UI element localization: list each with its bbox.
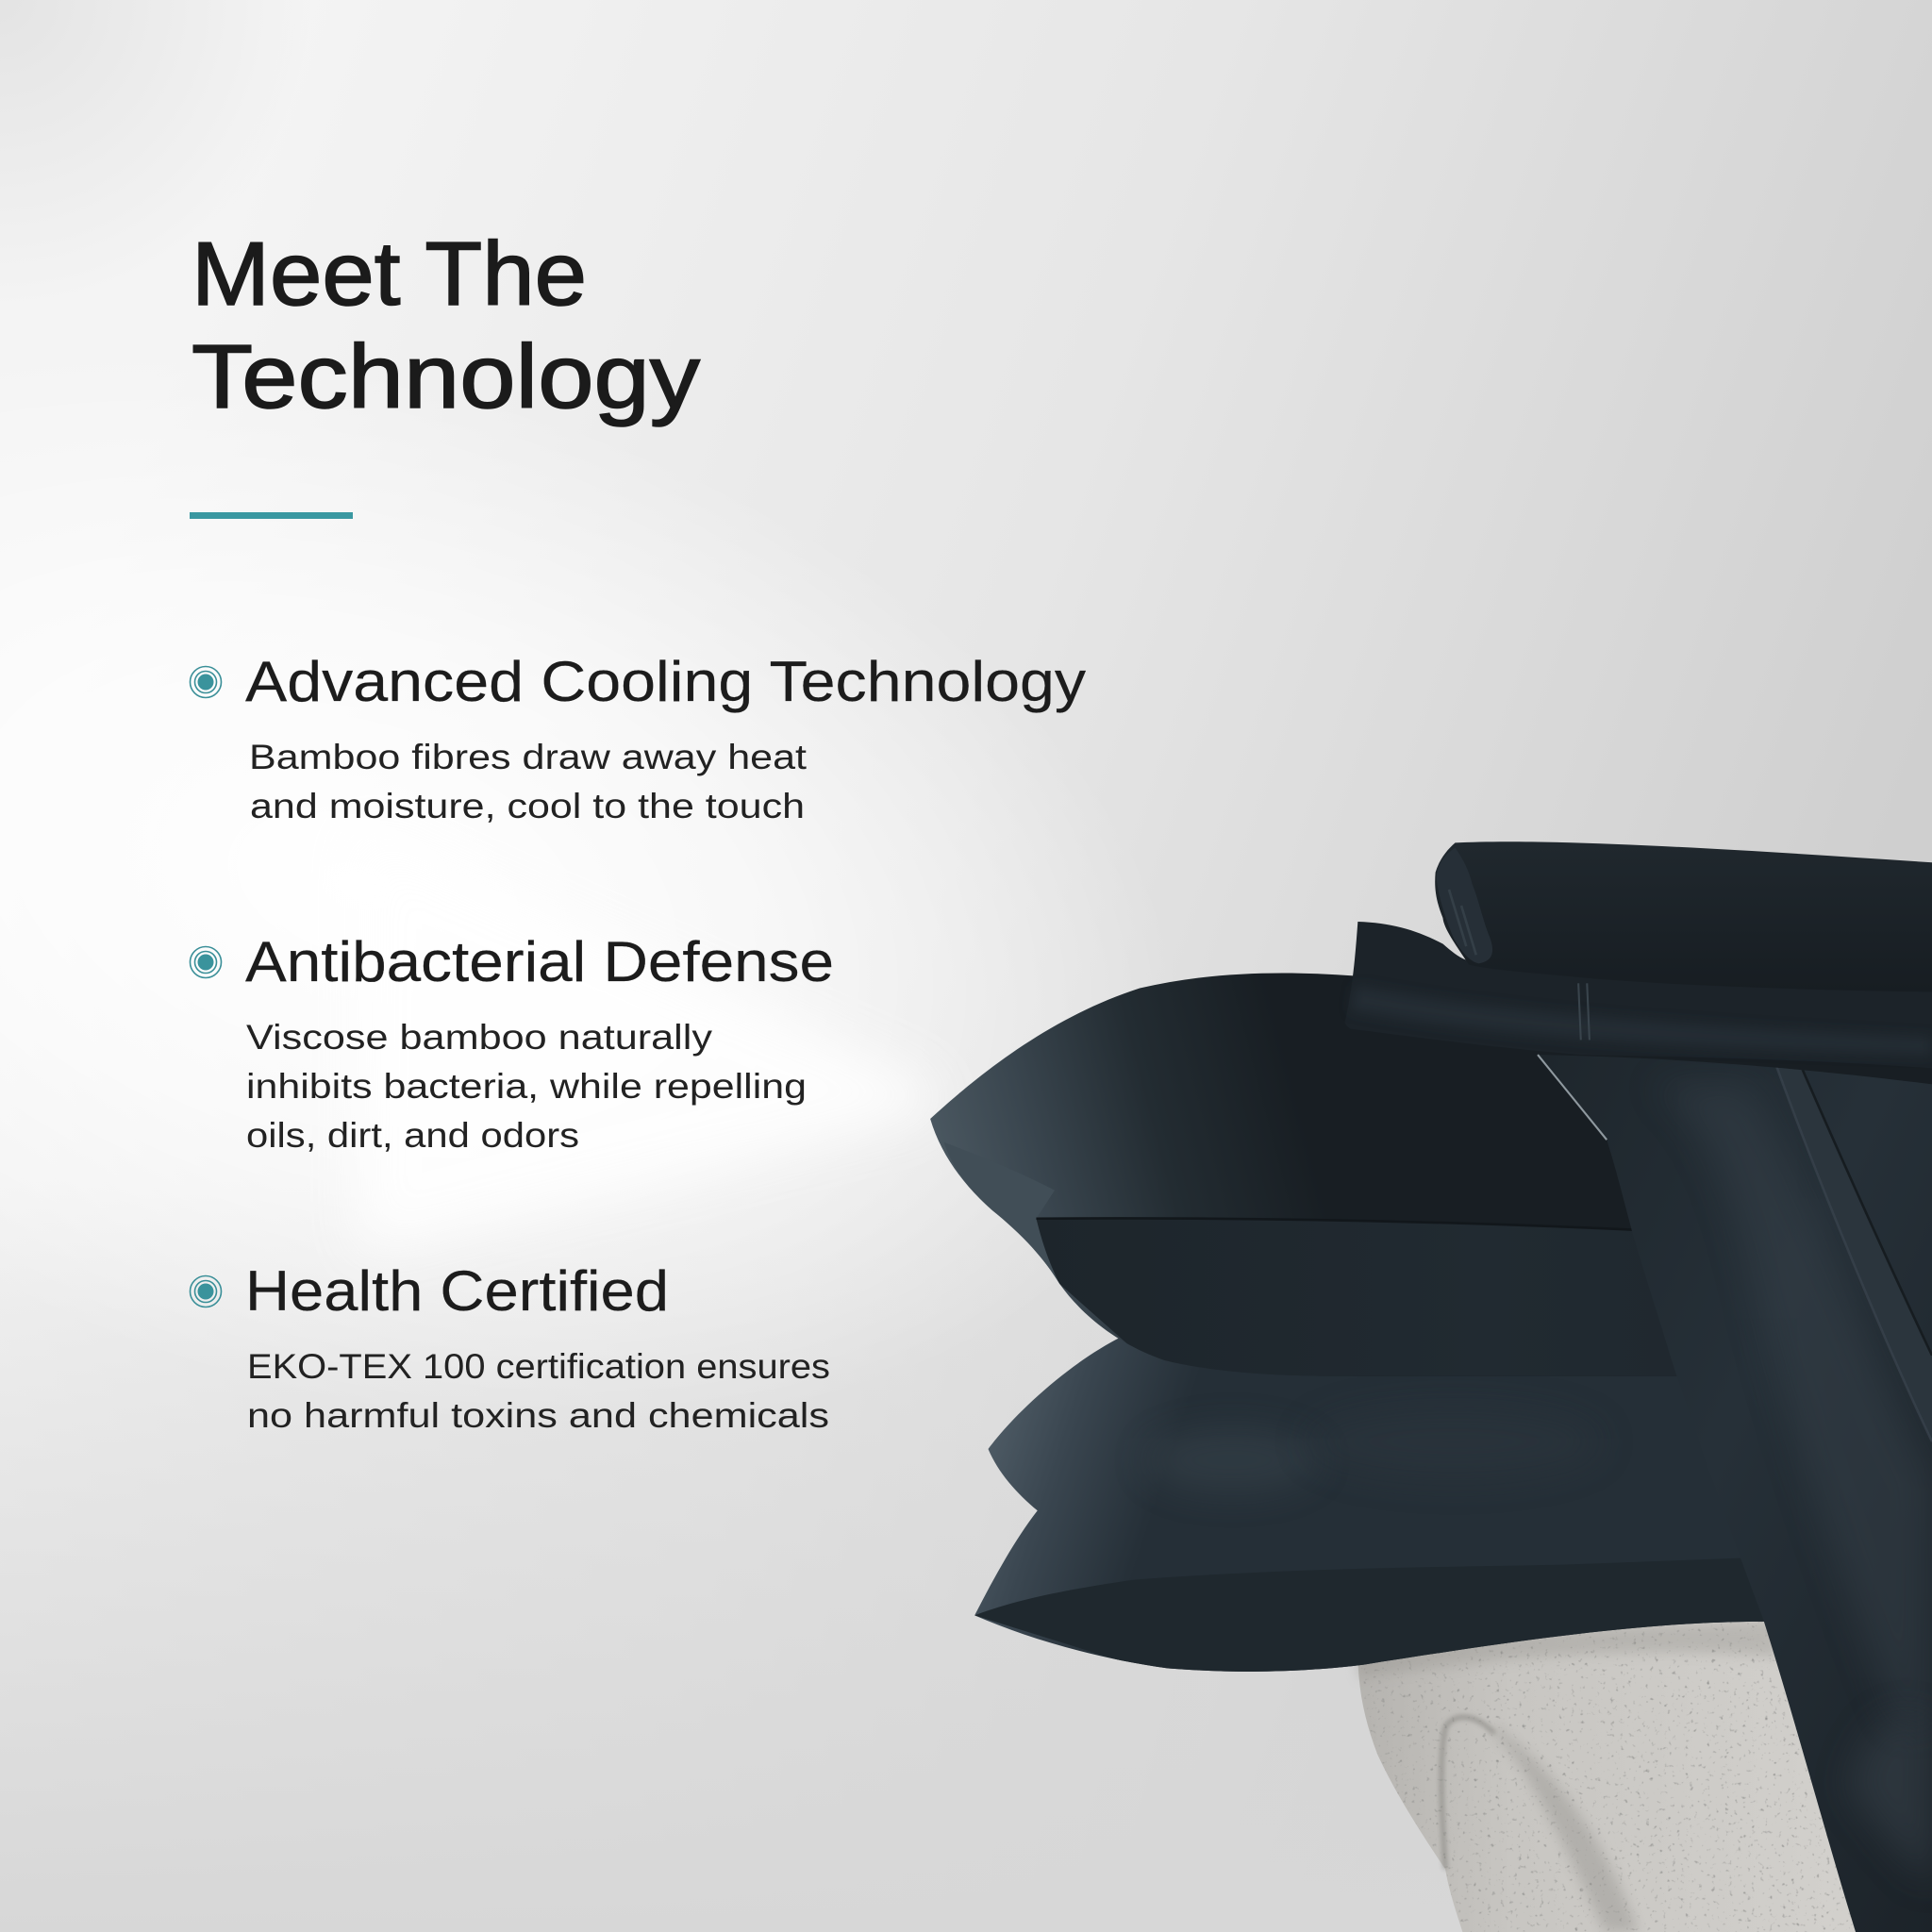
heading: Antibacterial Defense [245, 930, 834, 993]
description: EKO-TEX 100 certification ensures [247, 1347, 830, 1386]
heading: Advanced Cooling Technology [245, 650, 1086, 713]
title [192, 224, 700, 427]
upper pillow [930, 973, 1932, 1380]
teal accent rule [190, 512, 353, 519]
icon: teal concentric bullet [191, 947, 221, 977]
description [247, 1347, 830, 1435]
description: and moisture, cool to the touch [250, 787, 805, 825]
feature: Antibacterial Defense [191, 930, 834, 1155]
description [246, 1018, 807, 1155]
icon: teal concentric bullet [191, 1275, 221, 1307]
feature: Health Certified [191, 1259, 830, 1435]
lower pillow [974, 1337, 1824, 1675]
description [249, 738, 808, 825]
description: inhibits bacteria, while repelling [246, 1067, 807, 1106]
description: no harmful toxins and chemicals [247, 1396, 829, 1435]
photo: dark bedding stacked on a concrete stand [930, 841, 1932, 1932]
draped sheet [1538, 1055, 1932, 1932]
description: Viscose bamboo naturally [246, 1018, 713, 1057]
feature: Advanced Cooling Technology [191, 650, 1086, 825]
folded sheet, lower layer [1345, 922, 1932, 1068]
title: Technology [192, 326, 700, 427]
folded sheet, upper roll [1435, 841, 1932, 991]
title: Meet The [192, 224, 587, 325]
heading: Health Certified [245, 1259, 669, 1323]
icon: teal concentric bullet [191, 666, 221, 698]
description: oils, dirt, and odors [246, 1116, 579, 1155]
concrete stand [1357, 1602, 1873, 1932]
description: Bamboo fibres draw away heat [249, 738, 808, 776]
